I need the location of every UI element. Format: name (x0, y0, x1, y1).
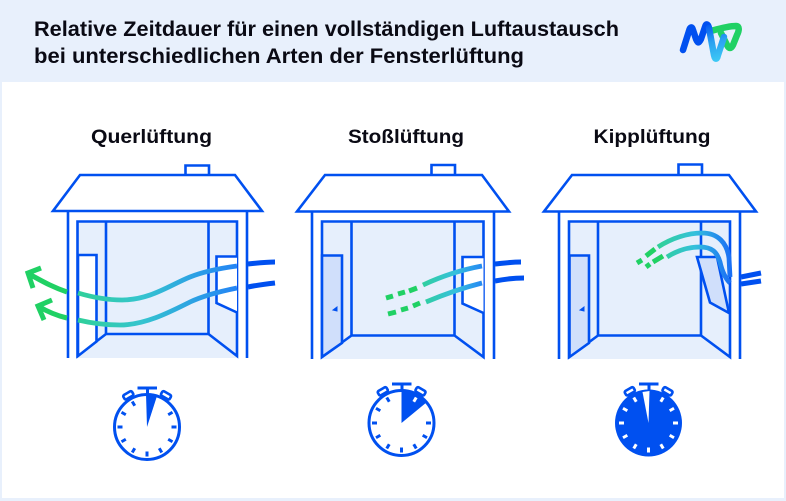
heading: Stoßlüftung: Stoßlüftung (348, 127, 464, 148)
house: Kipplüftung (544, 164, 761, 359)
airflow (658, 233, 730, 277)
heading: Querlüftung: Querlüftung (91, 127, 212, 148)
outside air in (495, 262, 524, 281)
closed door (570, 256, 589, 357)
airflow (78, 266, 237, 300)
green dashes (386, 288, 417, 298)
logo (683, 24, 739, 59)
remaining wedge (642, 391, 650, 423)
open window (462, 257, 484, 313)
elapsed wedge (146, 394, 157, 427)
open door (78, 255, 96, 356)
airflow (423, 266, 482, 285)
house: Querlüftung (28, 166, 275, 358)
open window (216, 256, 237, 312)
house: Stoßlüftung (297, 165, 524, 359)
closed door (322, 256, 342, 357)
stopwatch: Querlüftung (114, 388, 180, 460)
tilted window (697, 257, 729, 313)
outside air in (248, 262, 275, 287)
title (34, 18, 619, 68)
stopwatch: Kipplüftung (615, 384, 682, 456)
stopwatch: Stoßlüftung (369, 384, 434, 456)
header band (0, 0, 786, 82)
title: Relative Zeitdauer für einen vollständigen Luftaustausch (34, 18, 619, 41)
outside air in (741, 273, 761, 284)
heading: Kipplüftung: Kipplüftung (594, 127, 710, 148)
green arrows out (28, 268, 67, 292)
green dashes (637, 249, 655, 263)
door handle (333, 307, 337, 311)
title: bei unterschiedlichen Arten der Fensterlüftung (34, 45, 524, 68)
elapsed wedge (402, 390, 427, 423)
door handle (580, 307, 584, 311)
